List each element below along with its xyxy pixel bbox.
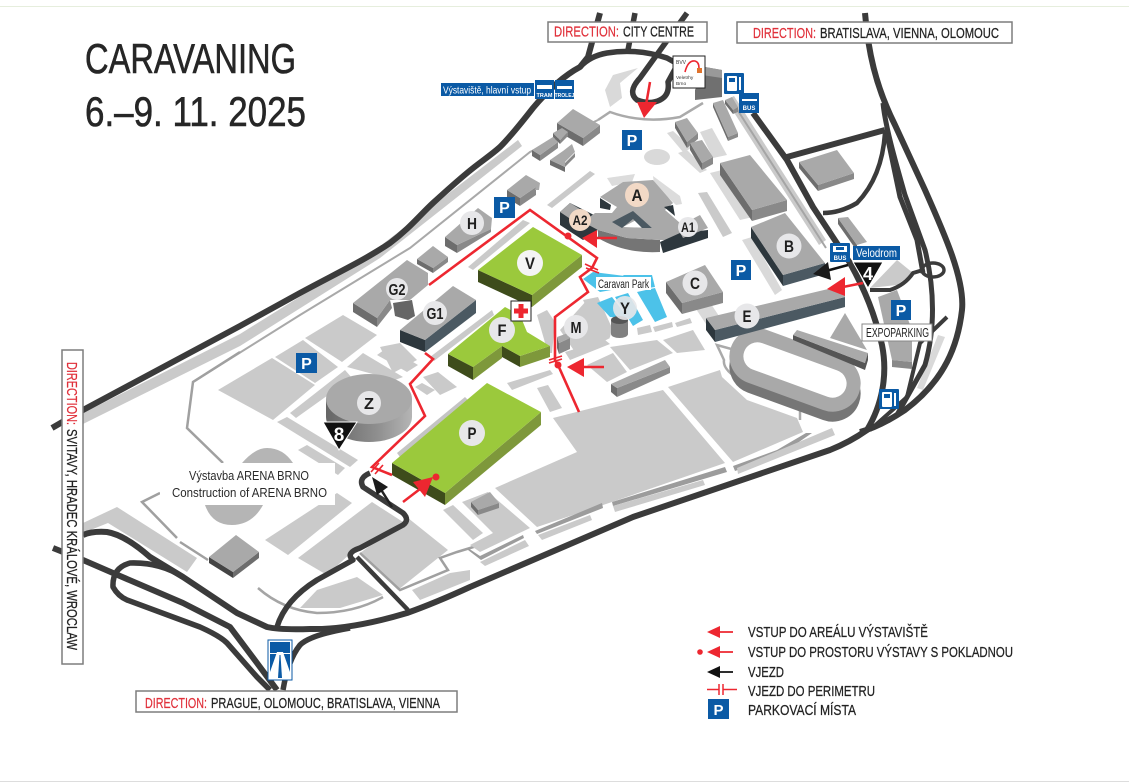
arrow: P entrance [403,474,440,502]
title [85,35,306,135]
direction box: Prague, Olomouc, Bratislava, Vienna: DIRECTION: [145,695,207,712]
icon: bus north [739,93,759,113]
buildings grey [209,67,912,578]
hall A complex: A1 [681,219,695,235]
label: Vystaviste hlavni vstup with tram and trolley icons: TROLEJ [555,93,575,99]
green hall P [392,383,541,505]
logo: BVV Veletrhy Brno: Brno [676,81,686,87]
building by P [507,175,540,206]
hall B [751,213,825,286]
hall G1 [400,286,476,352]
hall Z: Z [364,396,374,413]
gate sign 4 [853,262,883,288]
direction box: city centre: CITY CENTRE [623,24,694,40]
icon: fuel station north [724,73,744,94]
icon: bus at Velodrom: BUS [834,256,846,262]
label M [564,315,588,339]
label: Caravan Park [596,277,651,291]
icon: fuel station south [879,389,899,409]
logo: BVV Veletrhy Brno: Veletrhy [676,75,694,81]
hall A complex: A [632,186,642,205]
label: Vystaviste hlavni vstup with tram and trolley icons: Výstaviště, hlavní vstup [443,84,531,96]
pavilions [675,67,738,170]
legend row: parking: P [713,702,724,719]
hall E [706,285,845,342]
gate sign 8: 8 [334,425,344,446]
hall near east [720,155,787,221]
parking signs: P [499,200,510,217]
arrow: main entrance [637,82,657,118]
arrow: E entrance [827,277,863,296]
velodrome [730,329,860,421]
red perimeter route [371,210,599,475]
direction box: Svitavy, Hradec Kralove, Wroclaw: DIRECTION: [63,362,80,425]
road network [52,13,962,690]
label: Caravan Park: Caravan Park [598,279,649,291]
direction box: Svitavy, Hradec Kralove, Wroclaw [62,350,83,664]
hall A complex [560,174,708,253]
hall G2: G2 [388,282,406,299]
hall G1: G1 [426,306,444,323]
box north east [799,150,867,251]
icon: bus at Velodrom [830,243,850,262]
pavilion Y [611,296,637,338]
parking signs [296,130,911,373]
hall M small [557,333,570,354]
legend row: entry to grounds [707,624,928,641]
hall H: H [467,216,477,233]
label M: M [570,320,582,337]
direction box: Bratislava, Vienna, Olomouc: BRATISLAVA, VIENNA, OLOMOUC [820,25,999,42]
green hall F: F [498,321,506,340]
parking signs: P [896,303,907,320]
pavilion Y: Y [620,299,631,318]
green hall P: P [468,424,476,443]
label: Vystaviste hlavni vstup with tram and trolley icons [441,80,575,99]
logo: BVV Veletrhy Brno [673,56,705,88]
legend row: parking [708,699,856,719]
label: Vystaviste hlavni vstup with tram and trolley icons: TRAM [537,93,553,99]
icon: bus north: BUS [743,106,755,112]
small box near P [471,492,499,515]
legend row: vehicle entry: VJEZD [748,665,784,681]
label: Expoparking [862,324,932,341]
hall G2 [353,260,428,327]
direction box: Svitavy, Hradec Kralove, Wroclaw: SVITAVY, HRADEC KRÁLOVÉ, WROCLAW [63,429,80,651]
long low building south of M [611,360,670,397]
hall C [666,265,723,314]
icon: motorway sign [268,640,292,680]
direction box: Bratislava, Vienna, Olomouc [737,22,1012,43]
legend row: entry with ticket office [697,644,1013,661]
exhibition grounds: parking lots and paved areas [83,68,945,613]
building cluster north [532,109,600,172]
icon: first aid cross [511,301,531,321]
hall Z [326,374,412,442]
legend row: parking: PARKOVACÍ MÍSTA [748,702,856,719]
logo: BVV Veletrhy Brno: BVV [676,60,687,66]
square box south west [209,535,259,578]
legend [697,624,1013,719]
label: Arena Brno construction: Výstavba ARENA BRNO [189,468,309,483]
parking signs: P [736,263,747,280]
title: 6.–9. 11. 2025 [85,88,306,135]
arrow: vehicle entry B [813,262,848,280]
direction box: Bratislava, Vienna, Olomouc: DIRECTION: [753,25,816,42]
arrow: vehicle entry south [372,477,392,507]
arrow: M entrance [567,358,604,377]
label: Velodrom: Velodrom [856,246,897,260]
hall A complex: A2 [572,212,588,228]
arrow: A2 entrance [582,230,617,248]
hall E: E [742,307,752,326]
legend row: entry with ticket office: VSTUP DO PROSTORU VÝSTAVY S POKLADNOU [748,644,1013,661]
legend row: vehicle entry [707,665,784,681]
direction box: city centre: DIRECTION: [554,24,619,40]
parking signs: P [627,133,638,150]
hall H [445,208,492,253]
gate sign 8 [323,422,357,450]
gate sign 4: 4 [863,264,873,284]
caravan park blue area [583,272,667,326]
green hall F [448,307,550,380]
direction box: Prague, Olomouc, Bratislava, Vienna: PRAGUE, OLOMOUC, BRATISLAVA, VIENNA [211,695,440,712]
label: Expoparking: EXPOPARKING [866,326,929,340]
parking signs: P [301,356,312,373]
velodrome side buildings [793,290,912,370]
label: Arena Brno construction [160,463,335,505]
legend row: perimeter entry: VJEZD DO PERIMETRU [748,684,875,700]
direction box: Prague, Olomouc, Bratislava, Vienna [136,691,457,712]
direction box: city centre [548,22,707,42]
legend row: entry to grounds: VSTUP DO AREÁLU VÝSTAVIŠTĚ [748,624,928,641]
hall C: C [690,274,700,293]
green hall V [478,227,582,307]
green hall V: V [525,254,536,273]
small building [417,246,448,273]
title: CARAVANING [85,35,296,82]
label: Arena Brno construction: Construction of ARENA BRNO [172,485,327,500]
hall B: B [784,237,794,256]
